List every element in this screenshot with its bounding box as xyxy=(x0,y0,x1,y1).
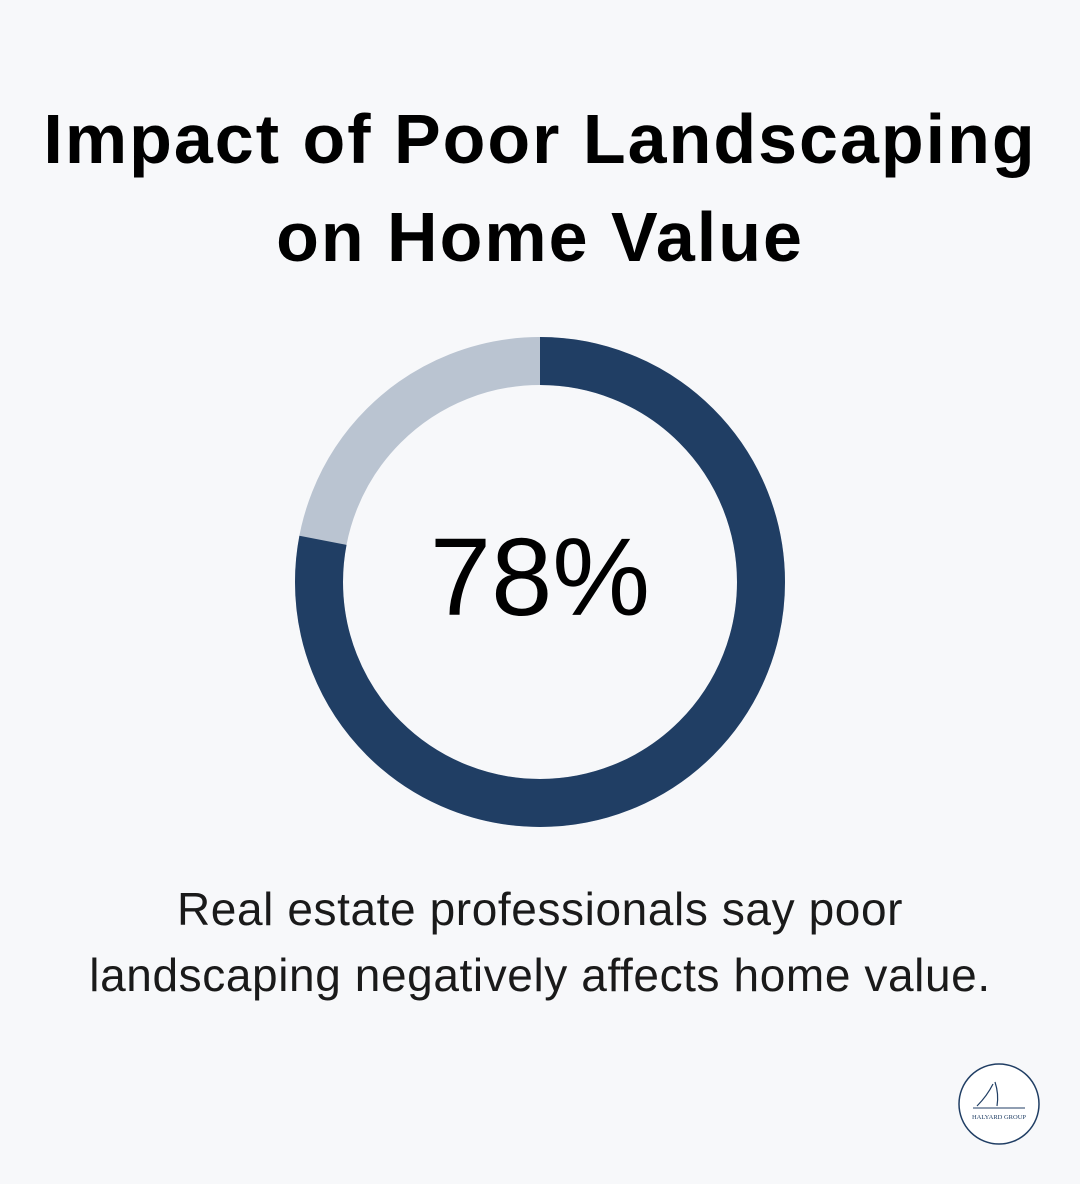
donut chart: 78% xyxy=(430,516,650,639)
title: Impact of Poor Landscaping xyxy=(43,100,1037,178)
caption xyxy=(89,883,991,1001)
title xyxy=(43,100,1037,276)
caption: Real estate professionals say poor xyxy=(177,883,903,935)
caption: landscaping negatively affects home value. xyxy=(89,949,991,1001)
logo xyxy=(958,1063,1040,1145)
logo: HALYARD GROUP xyxy=(972,1114,1026,1121)
title: on Home Value xyxy=(276,198,804,276)
